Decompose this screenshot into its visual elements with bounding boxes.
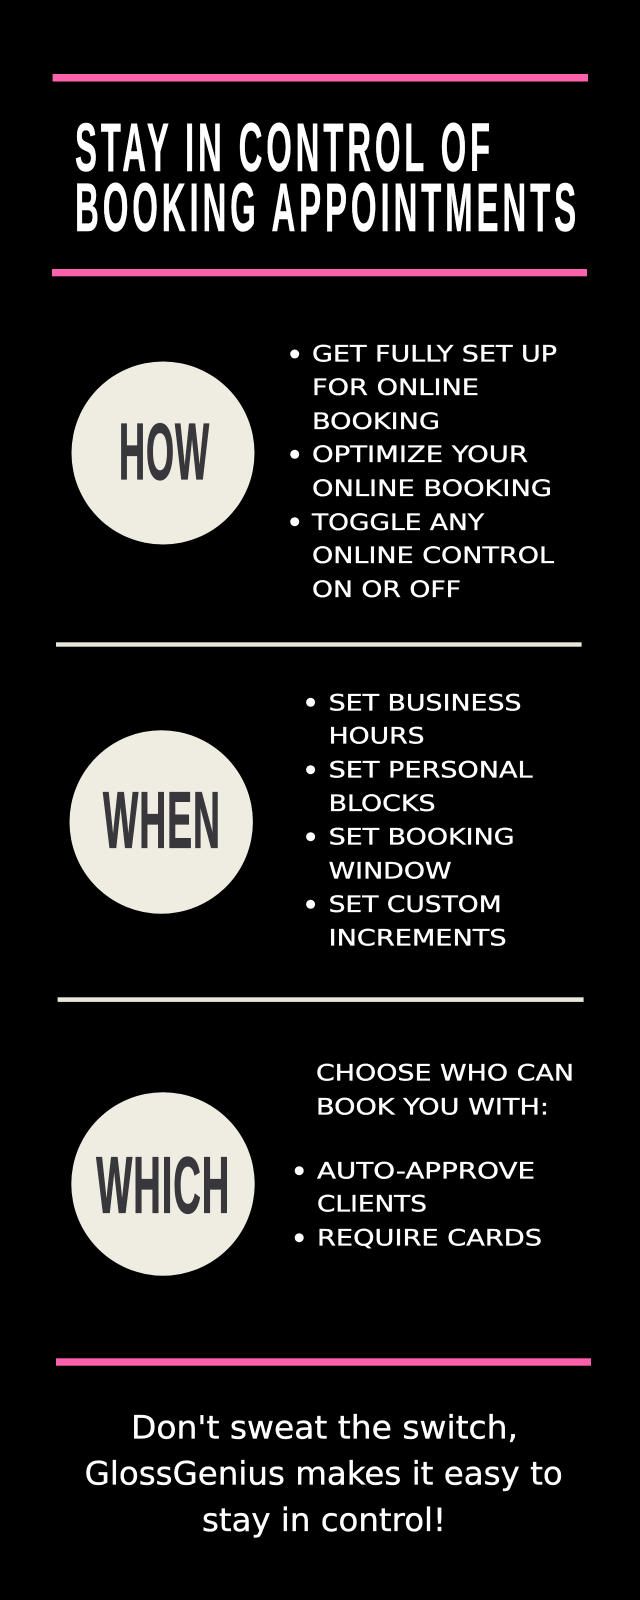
how bullet list: ON OR OFF: [312, 577, 461, 603]
footer message: stay in control!: [202, 1501, 446, 1539]
which text and bullets: AUTO-APPROVE: [317, 1158, 535, 1184]
top pink bar: [53, 74, 588, 82]
icon: which circle: [71, 1092, 255, 1276]
when bullet list: HOURS: [329, 724, 425, 750]
panel: when: [70, 690, 533, 951]
how bullet list: ONLINE BOOKING: [312, 476, 552, 502]
footer message: GlossGenius makes it easy to: [85, 1454, 563, 1492]
how bullet list: BOOKING: [312, 409, 440, 435]
which text and bullets: CHOOSE WHO CAN: [316, 1061, 574, 1087]
when bullet list: WINDOW: [329, 858, 452, 884]
when bullet list: [306, 690, 533, 951]
when bullet list: SET CUSTOM: [329, 892, 502, 918]
when bullet list: SET BOOKING: [329, 825, 515, 851]
icon: when circle: [70, 730, 253, 914]
how bullet list: [290, 342, 557, 603]
how bullet list: TOGGLE ANY: [311, 510, 484, 536]
panel: how: [72, 342, 557, 603]
panel: which: [71, 1061, 574, 1276]
which text and bullets: [295, 1061, 574, 1251]
how bullet list: GET FULLY SET UP: [312, 342, 557, 368]
when bullet list: BLOCKS: [329, 791, 436, 817]
which text and bullets: REQUIRE CARDS: [317, 1225, 542, 1251]
icon: how circle: [72, 362, 254, 544]
which text and bullets: BOOK YOU WITH:: [316, 1094, 549, 1120]
panel: when: WHEN: [103, 775, 221, 864]
footer message: [85, 1408, 563, 1539]
title: [75, 109, 580, 246]
which text and bullets: CLIENTS: [317, 1192, 427, 1218]
when bullet list: SET BUSINESS: [329, 690, 522, 716]
bottom pink bar: [56, 1358, 591, 1366]
how bullet list: OPTIMIZE YOUR: [312, 442, 528, 468]
when bullet list: INCREMENTS: [329, 925, 507, 951]
how bullet list: ONLINE CONTROL: [312, 543, 554, 569]
footer message: Don't sweat the switch,: [131, 1408, 518, 1446]
lower title pink bar: [52, 269, 587, 276]
panel: how: HOW: [119, 407, 210, 496]
panel: which: WHICH: [96, 1140, 230, 1229]
how bullet list: FOR ONLINE: [312, 375, 479, 401]
when bullet list: SET PERSONAL: [329, 758, 533, 784]
